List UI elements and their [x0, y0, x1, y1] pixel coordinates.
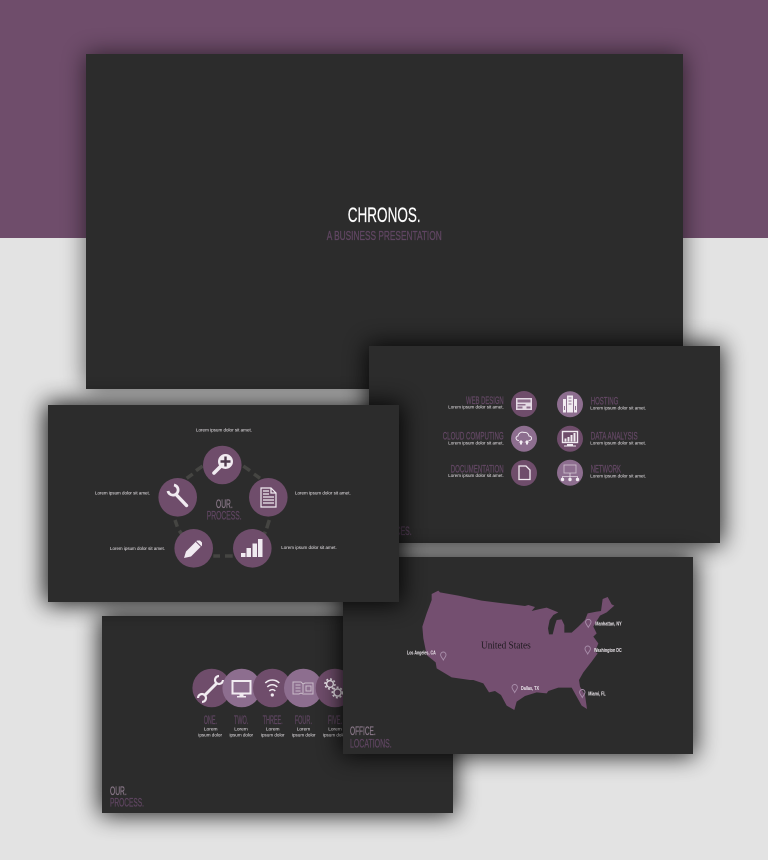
service: hosting — [557, 391, 646, 417]
step two: Lorem — [234, 726, 248, 732]
location: Los Angeles — [407, 651, 446, 660]
purple header band — [0, 0, 768, 238]
service: cloud computing — [443, 426, 537, 452]
service: network: NETWORK — [591, 464, 621, 476]
location: Manhattan — [586, 619, 622, 627]
service: data analysis — [557, 426, 646, 452]
step five — [316, 669, 354, 738]
caption lower right: Lorem ipsum dolor sit amet. — [281, 545, 337, 551]
cycle connector — [175, 466, 269, 556]
step one: ONE. — [204, 713, 217, 727]
service: documentation: DOCUMENTATION — [451, 463, 504, 475]
service: cloud computing: CLOUD COMPUTING — [443, 430, 504, 442]
center heading: our: OUR. — [216, 497, 233, 511]
step five: Lorem — [328, 726, 342, 732]
subtitle: A BUSINESS PRESENTATION — [327, 228, 442, 243]
process node: bar chart — [233, 529, 272, 568]
step three: THREE. — [263, 713, 283, 727]
map: United States — [422, 591, 614, 710]
step five: ipsum dolor — [323, 732, 347, 738]
panel: office locations slide — [341, 555, 695, 756]
location: Washington DC: Washington DC — [594, 648, 622, 654]
service: hosting: HOSTING — [591, 395, 618, 407]
service: documentation — [448, 460, 537, 486]
panel: services slide — [367, 344, 722, 545]
location: Los Angeles: Los Angeles, CA — [407, 651, 436, 657]
panel: process cycle slide — [45, 403, 402, 604]
service: data analysis: DATA ANALYSIS — [591, 431, 638, 443]
service: web design: Lorem ipsum dolor sit amet. — [448, 405, 504, 411]
process node: magnifier — [203, 446, 242, 484]
process node: document — [249, 478, 288, 517]
caption right: Lorem ipsum dolor sit amet. — [295, 491, 351, 497]
service: network — [557, 460, 646, 486]
slide heading: our: OUR. — [110, 784, 127, 798]
slide heading: locations: LOCATIONS. — [350, 736, 392, 750]
step one — [192, 669, 231, 738]
slide heading: services: SERVICES. — [375, 524, 412, 538]
location: Miami: Miami, FL — [588, 691, 606, 697]
panel: title slide — [86, 54, 683, 389]
location: Dallas — [512, 684, 539, 692]
caption left: Lorem ipsum dolor sit amet. — [95, 491, 150, 497]
service: data analysis: Lorem ipsum dolor sit amet. — [590, 440, 646, 446]
panel: process timeline slide — [100, 614, 455, 815]
service: web design: WEB DESIGN — [466, 395, 504, 407]
step two: ipsum dolor — [230, 732, 253, 738]
caption top: Lorem ipsum dolor sit amet. — [196, 428, 252, 434]
location: Dallas: Dallas, TX — [521, 686, 539, 692]
center heading: process: PROCESS. — [207, 508, 242, 522]
process node: wrench — [158, 478, 197, 517]
step four: Lorem — [297, 726, 310, 732]
slide heading: office: OFFICE. — [350, 724, 376, 738]
step three — [253, 669, 292, 738]
service: hosting: Lorem ipsum dolor sit amet. — [590, 405, 646, 411]
step four: FOUR. — [295, 713, 312, 727]
service: network: Lorem ipsum dolor sit amet. — [590, 474, 646, 480]
location: Miami — [580, 690, 606, 698]
step four — [284, 669, 323, 738]
process node: pencil — [174, 529, 213, 568]
step three: Lorem — [266, 726, 280, 732]
title: CHRONOS. — [348, 204, 421, 227]
step two: TWO. — [234, 713, 248, 727]
slide heading: process: PROCESS. — [110, 796, 144, 810]
caption lower left: Lorem ipsum dolor sit amet. — [110, 546, 165, 552]
service: web design — [448, 391, 537, 417]
map label: United States — [481, 640, 531, 651]
step two — [222, 669, 261, 738]
step four: ipsum dolor — [292, 732, 316, 738]
step five: FIVE. — [328, 713, 342, 727]
step one: Lorem — [204, 726, 218, 732]
location: Washington DC — [585, 646, 622, 654]
step one: ipsum dolor — [198, 732, 222, 738]
service: cloud computing: Lorem ipsum dolor sit amet. — [448, 440, 504, 446]
step three: ipsum dolor — [261, 732, 285, 738]
service: documentation: Lorem ipsum dolor sit amet. — [448, 473, 504, 479]
location: Manhattan: Manhattan, NY — [595, 621, 622, 627]
